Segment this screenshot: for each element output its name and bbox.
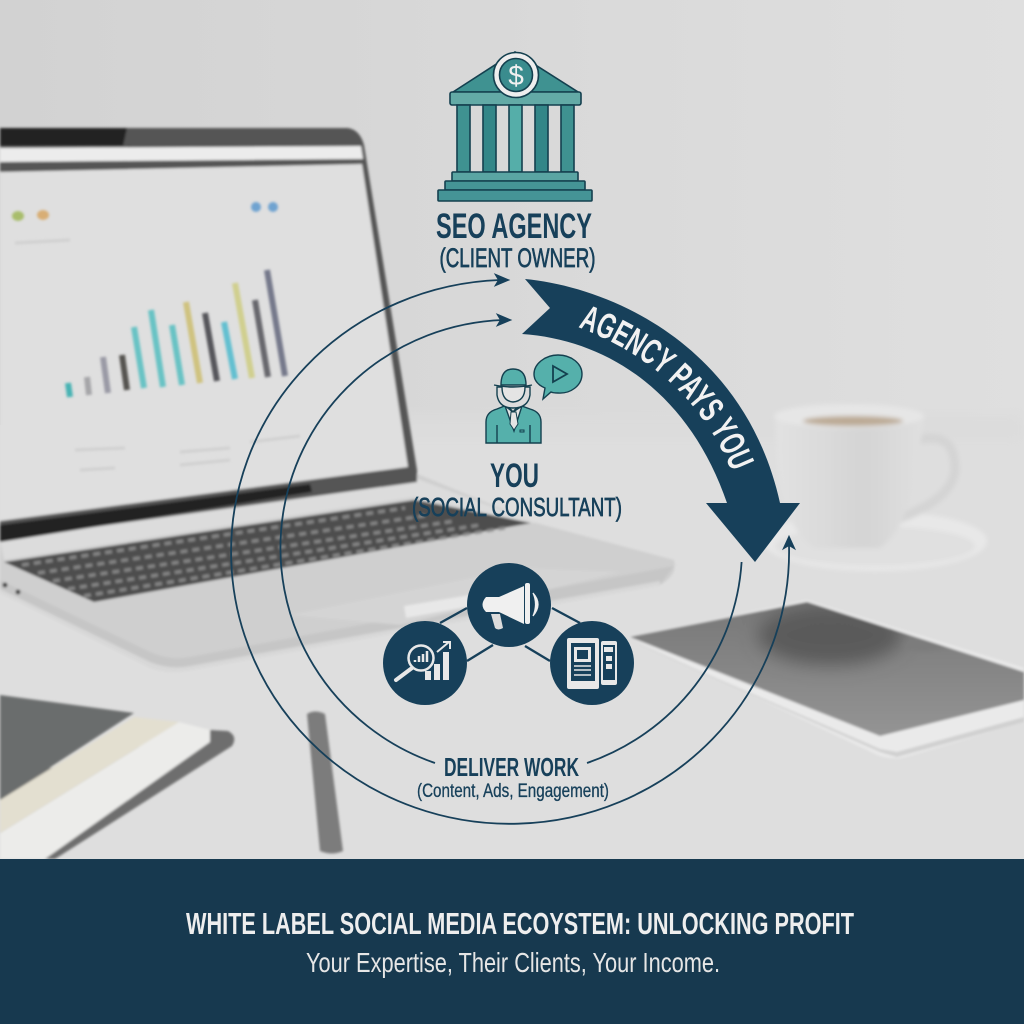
subheading: client owner: (CLIENT OWNER) — [440, 243, 596, 273]
icon: megaphone — [467, 563, 551, 647]
icon: analytics magnifier — [383, 621, 467, 705]
payment arrow: agency pays you: AGENCY PAYS YOU — [578, 306, 754, 468]
bank icon: SEO agency: $ — [508, 60, 524, 91]
footer tagline: Your Expertise, Their Clients, Your Income. — [306, 947, 720, 978]
connector lines between services — [440, 608, 580, 661]
tablet — [628, 600, 1024, 758]
speech bubble with play icon — [534, 355, 582, 399]
footer banner — [0, 859, 1024, 1024]
icon: phone and tablet — [550, 621, 634, 705]
heading: SEO agency: SEO AGENCY — [436, 207, 592, 246]
subheading: social consultant: (SOCIAL CONSULTANT) — [412, 492, 622, 522]
laptop — [0, 128, 675, 672]
notebooks and pen — [0, 695, 343, 859]
person icon: you — [486, 369, 541, 443]
inner loop arrow, left — [280, 315, 510, 763]
heading: you: YOU — [490, 457, 539, 495]
coffee cup — [763, 404, 987, 571]
label: deliver work: DELIVER WORK — [444, 752, 579, 782]
inner loop arrow, right — [587, 562, 742, 763]
outer loop arrow — [231, 275, 794, 824]
label: content, ads, engagement: (Content, Ads, Engagement) — [417, 781, 609, 802]
bar chart on screen — [12, 202, 300, 470]
payment arrow: agency pays you — [522, 279, 800, 562]
bank icon: SEO agency — [438, 52, 592, 201]
